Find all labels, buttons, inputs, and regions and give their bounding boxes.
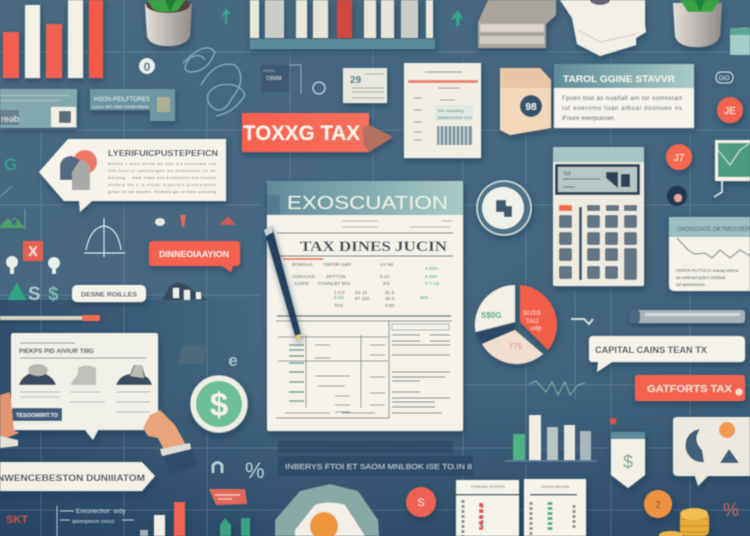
icon: red badge bottom: S bbox=[417, 497, 425, 509]
panel: teal banner left: reəb bbox=[1, 114, 19, 124]
heading: card title: PIEKPS PID AIVIUR TIIIG bbox=[19, 348, 94, 355]
callout: CAPITAL GAINS TAX: CAPITAL CAINS TEAN TX bbox=[595, 345, 708, 356]
table: detail rows bbox=[278, 335, 388, 413]
table: figures: S10HE bbox=[294, 281, 309, 287]
callout: CAPITAL GAINS TAX bbox=[589, 336, 745, 372]
icon: red badge bottom bbox=[406, 487, 436, 517]
bar chart: bottom left small bbox=[140, 502, 250, 536]
icon: green letter G: G bbox=[4, 155, 17, 174]
table: figures: FONNLBT 90S bbox=[318, 281, 350, 287]
pill: DESNE ROILLES: DESNE ROILLES bbox=[81, 292, 138, 298]
icon: white trees bbox=[6, 256, 60, 274]
callout: profile explanation bbox=[39, 139, 226, 212]
icon: X tile bbox=[23, 241, 43, 261]
card: small note bbox=[343, 68, 387, 103]
icon: potted plant right bbox=[673, 0, 722, 47]
text block: stat card body: iFoure eoerpuioser. bbox=[562, 115, 616, 122]
form: bottom left bbox=[456, 480, 519, 536]
icon: potted plant left bbox=[145, 0, 192, 46]
panel: small teal label: HSON-PEILFTORES bbox=[94, 97, 150, 103]
text block: lower left note: ıpiompecm vınco bbox=[72, 519, 114, 525]
table: figures bbox=[292, 262, 439, 309]
header strip bbox=[267, 181, 463, 215]
text strip: bottom caption bbox=[278, 441, 473, 476]
table: figures: ADBACKE bbox=[292, 274, 315, 280]
table: figures: 9:5 bbox=[383, 281, 390, 287]
label: GATFORTS TAX: GATFORTS TAX bbox=[647, 384, 732, 395]
text block: callout body: 240 Cout-of catettonges los hitmestaon on air bbox=[108, 169, 217, 173]
icon: red circle badge lower: J7 bbox=[674, 153, 685, 164]
card: red ticket bbox=[209, 489, 247, 505]
table: figures: 5.5B bbox=[334, 295, 344, 301]
icon: tan package with number: 98 bbox=[525, 102, 537, 113]
icon: hand left bbox=[0, 392, 19, 448]
heading: stat card title: TAROL GGINE STAVVR bbox=[563, 74, 675, 85]
icon: orange ball bbox=[719, 422, 735, 438]
text block: right side notes bbox=[392, 324, 450, 413]
icon: red circle badge lower bbox=[666, 144, 692, 170]
icon: building silhouettes bbox=[162, 282, 208, 300]
icon: X tile: X bbox=[28, 243, 38, 259]
icon: ring letter: 0 bbox=[144, 60, 151, 74]
table: figures: 97 110 bbox=[355, 296, 370, 302]
icon: red circle badge upper bbox=[717, 97, 743, 123]
icon: small check mark bbox=[571, 319, 593, 324]
speech box: chart icons bbox=[673, 417, 750, 486]
icon: dark knob bbox=[667, 186, 687, 206]
form: bottom right bbox=[524, 479, 586, 536]
chart: green screen bbox=[714, 140, 750, 197]
emblem: octagon seal bbox=[275, 484, 379, 536]
icon: crescent bbox=[685, 429, 704, 462]
text block: callout body: Bilsthe v more deime my cust a a sutesswat cop bbox=[108, 162, 216, 166]
tag: dollar shield: $ bbox=[623, 452, 633, 472]
calculator: S(d bbox=[563, 171, 571, 177]
icon: small ring bbox=[313, 82, 325, 94]
text block: lower left note: Ereunechor: srdy bbox=[76, 508, 126, 515]
banner arrow: TOXXG TAX bbox=[242, 113, 393, 152]
label: DINNEOIAAYION: DINNEOIAAYION bbox=[159, 249, 229, 259]
table: figures: 4 BI% bbox=[425, 266, 439, 272]
icon: coin stack bbox=[659, 508, 709, 536]
portrait: person one bbox=[19, 364, 56, 385]
icon: dollar coin: $ bbox=[210, 386, 228, 423]
text block: callout body bbox=[108, 162, 217, 194]
icons: money symbols: $ bbox=[48, 284, 59, 305]
icon: hand right bbox=[143, 410, 197, 474]
icon: dollar coin bbox=[190, 375, 248, 433]
icon: shape box bbox=[178, 345, 206, 364]
table: figures: 5-T.AB bbox=[425, 281, 439, 287]
table: figures: SPYTON bbox=[326, 274, 346, 280]
receipt document: Rbt Juamiding bbox=[438, 108, 464, 113]
banner arrow: TOXXG TAX: TOXXG TAX bbox=[243, 122, 360, 145]
icon: small badge: GIO bbox=[718, 76, 730, 82]
pill: DESNE ROILLES bbox=[72, 285, 146, 302]
pie chart: S$0G bbox=[481, 311, 501, 320]
pie chart: I'75 bbox=[510, 342, 523, 351]
calculator bbox=[553, 147, 644, 286]
receipt document bbox=[404, 63, 481, 158]
text block: callout body: stodery the s ie cleast hryonters proorwrpiten bbox=[108, 183, 216, 187]
pie chart: TAIJ bbox=[526, 318, 538, 325]
icon: red dot bbox=[610, 418, 616, 424]
panel: line chart card right: od aetmsstosn. bbox=[676, 282, 706, 287]
pie chart: udp bbox=[531, 325, 542, 332]
text block: lower left note bbox=[57, 506, 134, 536]
heading: TAX DINES JUCIN: TAX DINES JUCIN bbox=[300, 239, 447, 255]
icon: orange coin bbox=[644, 490, 672, 518]
panel: stat card top right bbox=[554, 64, 694, 128]
text block: stat card body: tut eoeromo tuan alboal doonuen ns bbox=[562, 105, 682, 112]
pie chart bbox=[475, 285, 557, 364]
heading: EXOSCUATION: EXOSCUATION bbox=[287, 192, 448, 213]
icon: green arrow top bbox=[450, 10, 464, 26]
panel: line chart card right bbox=[669, 217, 750, 291]
form: bottom right: SANVIE NIOJIAN bbox=[541, 485, 570, 489]
icon: clock dial bbox=[477, 181, 531, 235]
table: figures: 5 10 bbox=[380, 274, 390, 280]
panel: small teal label bbox=[90, 89, 175, 121]
icon: white paper stack bbox=[560, 0, 646, 56]
icon: tan package with number bbox=[500, 68, 551, 135]
table: figures: 900 bbox=[420, 295, 428, 301]
pencil left bbox=[0, 315, 100, 321]
arrow banner: investment duration bbox=[0, 462, 155, 491]
pie chart: SUSS bbox=[523, 310, 542, 317]
icon: dark triangle bbox=[720, 449, 739, 463]
icon: letter e: e bbox=[228, 351, 238, 370]
label: card button: TESOOMIRIT.TO bbox=[16, 413, 58, 419]
panel: teal banner left bbox=[0, 89, 77, 128]
pen on document bbox=[264, 226, 301, 342]
pen right bbox=[630, 310, 745, 323]
icon: ring letter bbox=[139, 58, 155, 74]
portrait: person three bbox=[116, 365, 152, 385]
table: figures: 4 50 bbox=[385, 303, 395, 309]
icon: dark mini card bbox=[261, 65, 301, 94]
icon: small badge bbox=[716, 72, 733, 83]
table: figures: UY 60 bbox=[380, 262, 394, 268]
icons: money symbols: S bbox=[28, 284, 41, 305]
card: small note: 29 bbox=[350, 75, 362, 86]
bar chart: bottom bbox=[505, 415, 597, 462]
icon: dark mini card: Pioctia bbox=[263, 68, 276, 73]
columns: building top bbox=[250, 0, 435, 49]
icon: red percent: % bbox=[723, 500, 739, 520]
table: figures: TDPOR S&R bbox=[323, 262, 352, 268]
label: GATFORTS TAX bbox=[635, 375, 745, 401]
tag: dollar shield bbox=[611, 432, 645, 488]
panel: small teal label: Lyson dIO Mist Credit Aliens bbox=[92, 105, 149, 109]
text block: callout body: Adroing, . mew fiaba and braftonent hot-frocent bbox=[108, 176, 216, 180]
label: DINNEOIAAYION bbox=[149, 241, 240, 272]
heading: callout title: LYERIFUICPUSTEPEFICN bbox=[108, 149, 218, 158]
icon: lock arch bbox=[213, 462, 222, 473]
text block: callout body: grtian on ine smoshc. Riilmwis get at fome sonveing bbox=[108, 190, 216, 194]
text block: stat card body bbox=[562, 95, 682, 122]
text block: stat card body: Fpven blat as nuafiall am tur somnstart bbox=[562, 95, 682, 102]
icon: red circle badge upper: JE bbox=[724, 106, 736, 117]
panel: line chart card right: OKROI-RUTIOUS maoaj selene bbox=[676, 268, 739, 273]
tax document main bbox=[267, 181, 463, 431]
card: people comparison bbox=[11, 333, 158, 440]
table: figures: BONHUS bbox=[292, 262, 313, 268]
icons: money symbols bbox=[7, 282, 59, 305]
icon: orange coin: 2 bbox=[655, 500, 661, 511]
table: figures: S1 11 bbox=[355, 290, 368, 296]
icon: wireframe key scribble bbox=[183, 48, 245, 116]
bar chart: top left bbox=[3, 0, 103, 78]
table: figures: 25 0 bbox=[385, 296, 395, 302]
chart: small mountain line bbox=[0, 186, 25, 228]
panel: line chart card right: an entiruezopiton trreitsat bbox=[676, 275, 726, 280]
table: figures: 6 BIN bbox=[425, 274, 438, 280]
icon: people figures bbox=[60, 150, 97, 190]
form: bottom left: PONEVAE ROOVEN bbox=[471, 485, 505, 489]
icon: red mark: SKT bbox=[6, 514, 28, 526]
table: figures: 91.5 bbox=[385, 290, 395, 296]
icon: green arrow bbox=[220, 8, 231, 24]
icon: stacked documents bbox=[478, 0, 556, 48]
icons: small marks bbox=[155, 215, 236, 227]
label: card button bbox=[12, 408, 62, 421]
icon: dark mini card: C9WM bbox=[266, 76, 281, 82]
icon: small teal box bbox=[730, 28, 750, 55]
icon: percent: % bbox=[245, 458, 265, 483]
icon: arch diagram bbox=[84, 218, 125, 257]
receipt document: BBBEHOANS 2CA bbox=[438, 115, 472, 120]
chart: market sparkline bbox=[529, 381, 585, 395]
table: figures: 1 0.5 bbox=[334, 290, 345, 296]
table: figures: TH2 bbox=[334, 303, 343, 309]
text strip: bottom caption: INBERYS FTOI ET SAOM MNLBOK ISE TO.IN 8 bbox=[285, 462, 472, 471]
arrow banner: investment duration: NWENCEBESTON DUNIIIATOM bbox=[0, 473, 145, 483]
portrait: person two bbox=[70, 366, 96, 385]
